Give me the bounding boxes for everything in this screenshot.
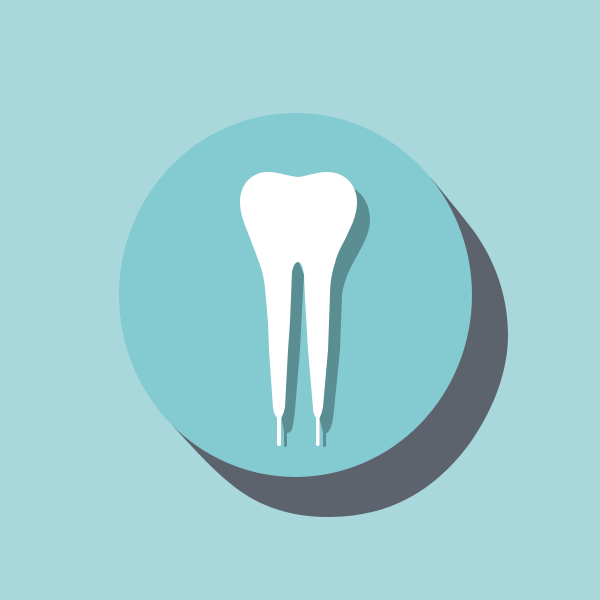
- shadow: crown and right root: [318, 188, 370, 447]
- tooth shadow: [282, 188, 370, 447]
- long shadow of circle: [172, 178, 508, 517]
- circle badge: [119, 113, 472, 477]
- tooth: [240, 172, 357, 446]
- shadow: left root: [282, 255, 304, 447]
